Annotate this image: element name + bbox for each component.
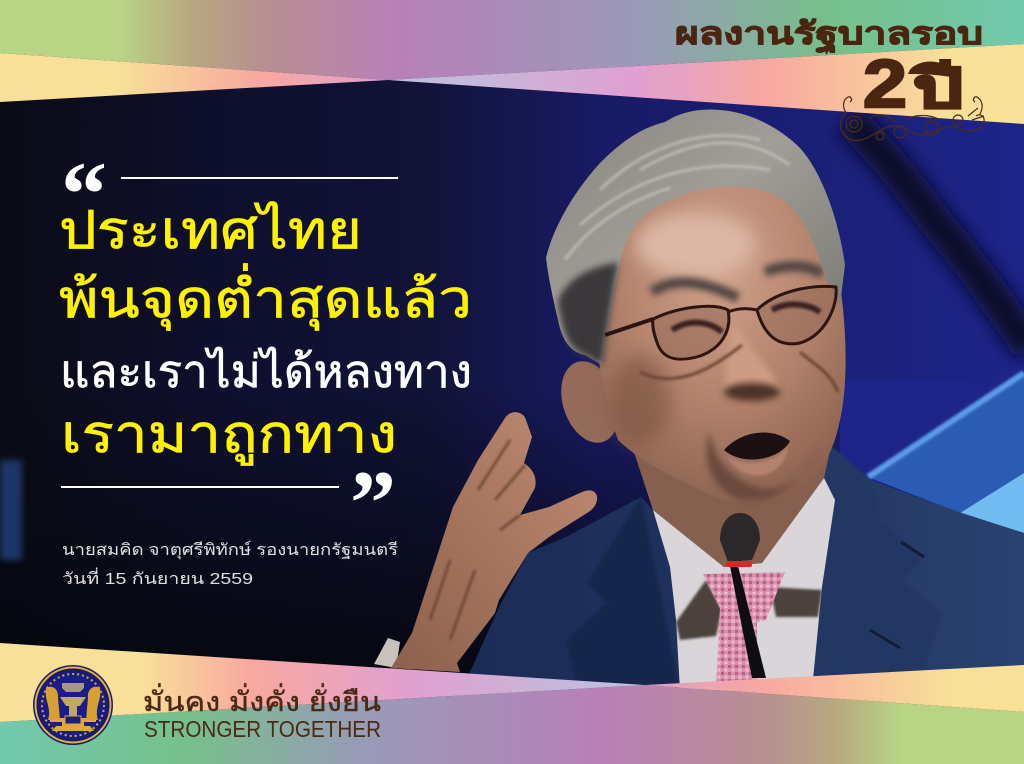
eyebrows bbox=[652, 266, 822, 298]
microphone bbox=[720, 513, 760, 562]
quote text block bbox=[59, 201, 472, 466]
quote line 1: ประเทศไทย bbox=[59, 201, 362, 260]
slogan: English: STRONGER TOGETHER bbox=[144, 716, 381, 742]
title: 2 ปี bbox=[863, 46, 963, 122]
quote mark: closing: ” bbox=[350, 452, 396, 554]
neck bbox=[630, 400, 841, 567]
necktie bbox=[703, 572, 785, 690]
quote mark: opening: “ bbox=[61, 143, 107, 245]
date: วันที่ 15 กันยายน 2559 bbox=[62, 567, 253, 588]
collar shadows bbox=[676, 580, 822, 640]
icon: government seal bbox=[33, 665, 113, 745]
lapel shadows bbox=[566, 497, 680, 690]
rule: closing bbox=[61, 486, 339, 488]
shirt cuff bbox=[374, 638, 400, 668]
quote line 2: พ้นจุดต่ำสุดแล้ว bbox=[59, 263, 472, 331]
glasses bbox=[605, 286, 836, 359]
finger creases bbox=[430, 440, 525, 640]
title: ผลงานรัฐบาลรอบ: ผลงานรัฐบาลรอบ bbox=[675, 16, 983, 54]
quote line 4: เรามาถูกทาง bbox=[61, 406, 397, 466]
shirt collar bbox=[653, 478, 835, 690]
ear bbox=[551, 354, 629, 450]
top banner: colour band bbox=[0, 0, 1024, 124]
speaker name: นายสมคิด จาตุศรีพิทักษ์ รองนายกรัฐมนตรี bbox=[62, 540, 398, 560]
raised hand bbox=[391, 412, 597, 672]
slogan: Thai: มั่นคง มั่งคั่ง ยั่งยืน bbox=[143, 683, 381, 717]
chin beard shadow bbox=[707, 430, 815, 501]
rule: opening bbox=[121, 177, 398, 179]
bottom banner: colour band bbox=[0, 643, 1024, 764]
face bbox=[595, 165, 846, 503]
suit jacket bbox=[470, 447, 1024, 700]
hair strands bbox=[565, 136, 790, 260]
hair bbox=[546, 110, 845, 365]
nose bbox=[725, 320, 778, 397]
photo: speaker portrait bbox=[374, 110, 1024, 700]
forehead highlight bbox=[635, 213, 755, 277]
title: 2 ปี: ปี bbox=[910, 59, 963, 119]
mouth bbox=[724, 432, 790, 460]
quote line 3: และเราไม่ได้หลงทาง bbox=[60, 346, 472, 397]
attribution bbox=[62, 540, 398, 588]
eyes bbox=[672, 304, 820, 332]
title: 2 ปี: 2 bbox=[863, 46, 907, 122]
dark side hair bbox=[558, 262, 618, 365]
cheek shadow lines bbox=[640, 345, 838, 392]
icon: ornament flourish bbox=[841, 97, 984, 141]
cheek shade bbox=[610, 355, 670, 445]
